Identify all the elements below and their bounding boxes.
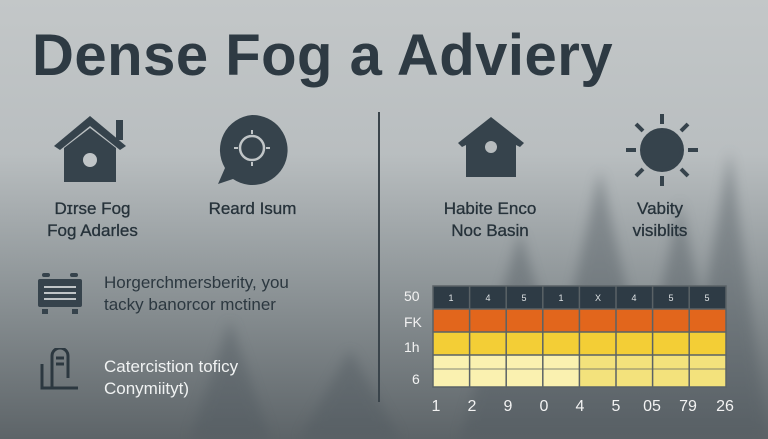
chart: visibility table: 1 <box>432 398 441 415</box>
label: habite <box>444 199 536 240</box>
chart: visibility table: 50 <box>404 288 420 304</box>
label: vabity: Vabity <box>637 199 683 218</box>
text: horger: Horgerchmersberity, you <box>104 273 289 292</box>
label: habite: Habite Enco <box>444 199 536 218</box>
icon: house <box>54 116 126 182</box>
chart: visibility table: 4 <box>631 293 637 303</box>
chart: visibility table: 0 <box>540 398 549 415</box>
icon: sun <box>626 114 698 186</box>
chart: visibility table: 26 <box>716 398 734 415</box>
chart: visibility table <box>404 285 734 415</box>
label: habite: Noc Basin <box>451 221 529 240</box>
chart: visibility table: 9 <box>504 398 513 415</box>
chart: visibility table: X <box>595 293 601 303</box>
icon: birdhouse <box>458 117 524 177</box>
chart: visibility table: 4 <box>485 293 491 303</box>
chart: visibility table: 5 <box>704 293 710 303</box>
icon: speech bubble <box>218 115 288 185</box>
text: horger: tacky banorcor mctiner <box>104 295 276 314</box>
chart: visibility table: 79 <box>679 398 697 415</box>
text: catercistion <box>104 357 238 398</box>
chart: visibility table: 4 <box>576 398 585 415</box>
label: reard isum: Reard Isum <box>209 199 296 218</box>
chart: visibility table: 1 <box>448 293 454 303</box>
label: dense fog: Fog Adarles <box>47 221 138 240</box>
chart: visibility table: 6 <box>412 371 420 387</box>
icon: document <box>40 348 78 390</box>
chart: visibility table: 5 <box>668 293 674 303</box>
title: Dense Fog a Adviery <box>32 23 613 88</box>
label: dense fog: Dɪrse Fog <box>55 199 130 218</box>
text: catercistion: Catercistion toficy <box>104 357 238 376</box>
chart: visibility table: 2 <box>468 398 477 415</box>
chart: visibility table: FK <box>404 314 423 330</box>
label: dense fog <box>47 199 138 240</box>
divider <box>378 112 380 402</box>
chart: visibility table: 5 <box>612 398 621 415</box>
chart: visibility table: 05 <box>643 398 661 415</box>
chart: visibility table: 1 <box>558 293 564 303</box>
chart: visibility table: 5 <box>521 293 527 303</box>
text: catercistion: Conymiityt) <box>104 379 189 398</box>
icon: calendar <box>38 273 82 314</box>
chart: visibility table: 1h <box>404 339 420 355</box>
label: vabity: visiblits <box>633 221 687 240</box>
label: vabity <box>632 199 687 240</box>
text: horger <box>104 273 289 314</box>
